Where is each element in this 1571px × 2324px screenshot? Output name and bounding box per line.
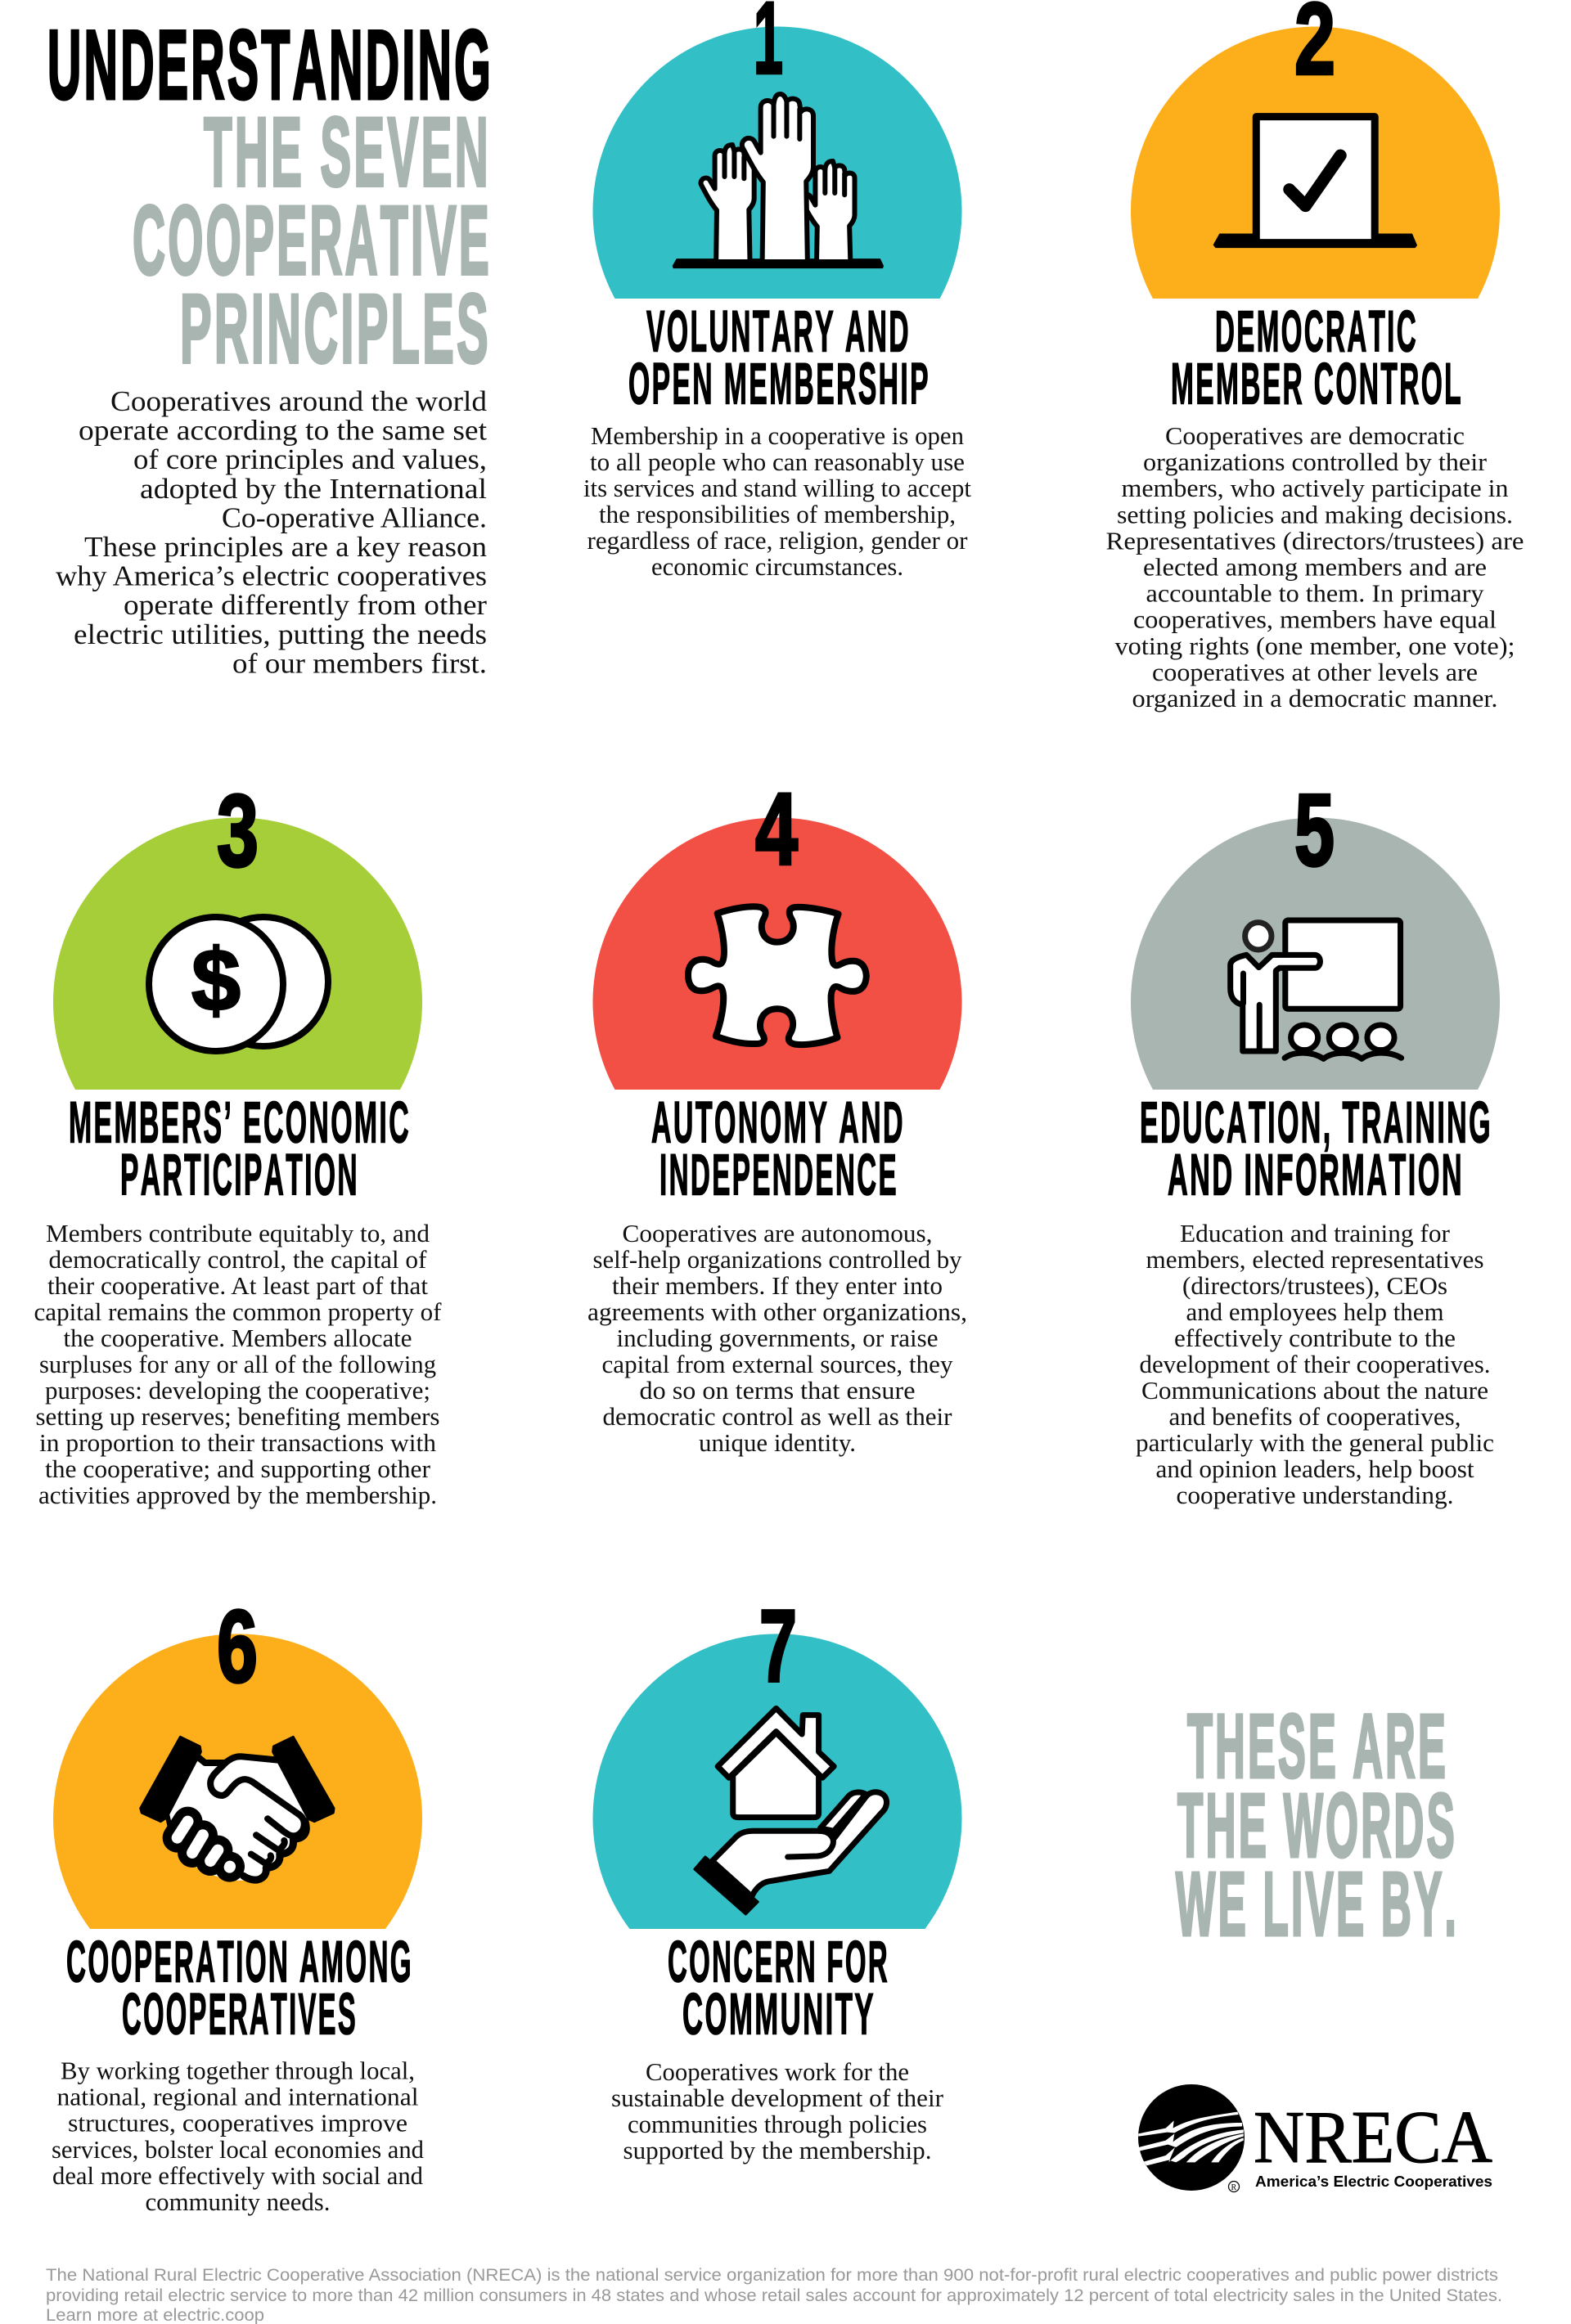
body text 3: setting up reserves; benefiting members xyxy=(36,1402,440,1431)
number 5: 5 xyxy=(1294,774,1335,888)
body text 5: and opinion leaders, help boost xyxy=(1155,1454,1474,1483)
number 6: 6 xyxy=(217,1590,258,1704)
body text 7: sustainable development of their xyxy=(611,2084,944,2112)
heading 7 xyxy=(668,1931,889,2047)
panel: principle 3: MEMBERS’ ECONOMIC xyxy=(69,1091,411,1155)
body text 3 xyxy=(34,1219,442,1509)
body text 6: community needs. xyxy=(146,2187,331,2216)
heading 1 xyxy=(628,299,930,417)
number 3: 3 xyxy=(217,774,259,888)
body text 4: democratic control as well as their xyxy=(602,1402,952,1431)
body text 3: activities approved by the membership. xyxy=(38,1481,437,1509)
body text 5: Communications about the nature xyxy=(1141,1376,1488,1405)
body text 3: the cooperative. Members allocate xyxy=(64,1324,412,1352)
footer text xyxy=(46,2266,1502,2324)
title xyxy=(47,10,493,384)
body text 5: effectively contribute to the xyxy=(1174,1324,1456,1352)
logo: NRECA xyxy=(1138,2084,1492,2192)
heading 6: COOPERATIVES xyxy=(122,1983,358,2047)
body text 2: Cooperatives are democratic xyxy=(1165,421,1465,450)
body text 3: purposes: developing the cooperative; xyxy=(45,1376,430,1405)
body text 7: supported by the membership. xyxy=(623,2136,931,2164)
panel: principle 6 xyxy=(52,1590,424,2216)
text: UNDERSTANDING xyxy=(47,10,493,119)
body text 7: Cooperatives work for the xyxy=(646,2057,909,2086)
body text 1: regardless of race, religion, gender or xyxy=(587,526,968,555)
semicircle 5 xyxy=(1131,818,1500,1090)
icon: coins: $ xyxy=(191,930,241,1029)
intro text: operate differently from other xyxy=(124,589,487,621)
footer text: providing retail electric service to more than 42 million consumers in 48 states and whose retail sales account for approximately 12 percent of total electricity sales in the United States. xyxy=(46,2286,1502,2305)
body text 7 xyxy=(611,2057,944,2164)
body text 2: accountable to them. In primary xyxy=(1146,579,1484,608)
icon: raised hands xyxy=(673,94,883,268)
text: PRINCIPLES xyxy=(180,274,491,384)
semicircle 4 xyxy=(592,818,962,1090)
panel: principle 7 xyxy=(592,1589,961,2164)
body text 5: development of their cooperatives. xyxy=(1139,1350,1491,1378)
panel: principle 5 xyxy=(1131,774,1500,1509)
text: COOPERATIVE xyxy=(133,186,492,295)
panel: principle 4: INDEPENDENCE xyxy=(659,1144,898,1207)
body text 1: the responsibilities of membership, xyxy=(599,500,956,528)
panel: principle 1: OPEN MEMBERSHIP xyxy=(628,352,930,417)
body text 4: agreements with other organizations, xyxy=(587,1297,967,1326)
intro text: of core principles and values, xyxy=(133,443,487,475)
heading 3 xyxy=(69,1091,411,1207)
logo registered mark xyxy=(1229,2181,1239,2192)
intro text: Cooperatives around the world xyxy=(110,385,488,417)
body text 6: By working together through local, xyxy=(61,2057,415,2084)
body text 6: services, bolster local economies and xyxy=(52,2135,424,2164)
semicircle 6 xyxy=(53,1634,422,1929)
intro text: operate according to the same set xyxy=(79,415,487,447)
body text 4: unique identity. xyxy=(699,1428,856,1457)
body text 4: capital from external sources, they xyxy=(602,1350,953,1378)
heading 3: PARTICIPATION xyxy=(120,1144,359,1207)
body text 2 xyxy=(1106,421,1524,712)
body text 2: cooperatives at other levels are xyxy=(1152,658,1478,686)
icon: handshake xyxy=(141,1737,334,1880)
heading 6 xyxy=(66,1931,413,2047)
body text 1: Membership in a cooperative is open xyxy=(591,421,964,450)
panel: principle 3 xyxy=(34,774,442,1509)
logo tagline: America’s Electric Cooperatives xyxy=(1255,2173,1492,2190)
footer text: The National Rural Electric Cooperative Association (NRECA) is the national service organization for more than 900 not-for-profit rural electric cooperatives and public power districts xyxy=(46,2266,1498,2285)
body text 2: elected among members and are xyxy=(1143,553,1487,581)
body text 1: to all people who can reasonably use xyxy=(590,447,965,476)
heading 2 xyxy=(1171,299,1463,417)
icon: puzzle piece xyxy=(688,906,867,1045)
heading 5 xyxy=(1140,1091,1492,1207)
body text 4: their members. If they enter into xyxy=(612,1271,943,1300)
panel: principle 2 xyxy=(1106,0,1524,712)
body text 5: and employees help them xyxy=(1186,1297,1443,1326)
body text 2: organized in a democratic manner. xyxy=(1132,684,1497,712)
panel: principle 4 xyxy=(587,772,967,1457)
body text 7: communities through policies xyxy=(628,2110,927,2138)
logo registered mark: R xyxy=(1231,2183,1237,2192)
intro text: These principles are a key reason xyxy=(84,531,487,563)
intro text: adopted by the International xyxy=(140,473,487,505)
body text 2: cooperatives, members have equal xyxy=(1133,605,1497,634)
body text 4 xyxy=(587,1219,967,1457)
intro text: why America’s electric cooperatives xyxy=(56,560,487,592)
text: THE SEVEN xyxy=(204,97,491,207)
body text 4: do so on terms that ensure xyxy=(640,1376,915,1405)
number 4: 4 xyxy=(755,772,798,887)
intro text: Co-operative Alliance. xyxy=(222,501,487,533)
body text 2: organizations controlled by their xyxy=(1143,447,1488,476)
body text 1 xyxy=(583,421,971,581)
body text 2: voting rights (one member, one vote); xyxy=(1114,632,1515,660)
intro text: electric utilities, putting the needs xyxy=(74,618,487,650)
body text 3: surpluses for any or all of the following xyxy=(39,1350,436,1378)
icon: teacher and students xyxy=(1231,920,1402,1059)
semicircle 1 xyxy=(592,27,962,299)
body text 5: members, elected representatives xyxy=(1146,1245,1484,1274)
panel: principle 7: CONCERN FOR xyxy=(668,1931,889,1994)
body text 1: its services and stand willing to accept xyxy=(583,474,971,502)
panel: principle 4: AUTONOMY AND xyxy=(651,1091,905,1155)
body text 5: (directors/trustees), CEOs xyxy=(1182,1271,1447,1300)
heading 1: VOLUNTARY AND xyxy=(646,299,911,365)
semicircle 2 xyxy=(1131,27,1500,299)
body text 6: national, regional and international xyxy=(57,2083,419,2110)
logo wordmark: NRECA xyxy=(1254,2096,1492,2178)
text: COOPERATION AMONG xyxy=(66,1931,413,1994)
icon: coins xyxy=(149,917,328,1051)
logo emblem xyxy=(1138,2084,1245,2191)
body text 3: democratically control, the capital of xyxy=(49,1245,427,1274)
closing slogan xyxy=(1176,1697,1459,1955)
body text 5: particularly with the general public xyxy=(1136,1428,1494,1457)
body text 5: cooperative understanding. xyxy=(1177,1481,1453,1509)
body text 4: Cooperatives are autonomous, xyxy=(622,1219,933,1247)
body text 2: setting policies and making decisions. xyxy=(1117,500,1513,528)
heading 7: COMMUNITY xyxy=(682,1983,876,2047)
body text 3: in proportion to their transactions with xyxy=(39,1428,436,1457)
body text 6: structures, cooperatives improve xyxy=(68,2109,407,2137)
body text 6 xyxy=(52,2057,424,2216)
intro text: of our members first. xyxy=(232,647,487,679)
intro text xyxy=(56,385,488,679)
body text 3: the cooperative; and supporting other xyxy=(45,1454,431,1483)
body text 4: including governments, or raise xyxy=(617,1324,938,1352)
body text 5 xyxy=(1136,1219,1494,1509)
body text 1: economic circumstances. xyxy=(651,552,903,581)
number 7: 7 xyxy=(759,1589,797,1703)
icon: house in hand xyxy=(695,1708,887,1914)
body text 3: Members contribute equitably to, and xyxy=(46,1219,430,1247)
body text 2: Representatives (directors/trustees) are xyxy=(1106,526,1524,555)
semicircle 7 xyxy=(592,1634,961,1929)
panel: principle 1 xyxy=(583,0,971,581)
body text 3: their cooperative. At least part of that xyxy=(47,1271,428,1300)
heading 4 xyxy=(651,1091,905,1207)
icon: ballot box xyxy=(1213,117,1417,248)
semicircle 3 xyxy=(53,818,422,1090)
body text 5: and benefits of cooperatives, xyxy=(1168,1402,1461,1431)
body text 2: members, who actively participate in xyxy=(1121,474,1509,502)
body text 6: deal more effectively with social and xyxy=(52,2161,423,2190)
body text 4: self-help organizations controlled by xyxy=(592,1245,962,1274)
body text 3: capital remains the common property of xyxy=(34,1297,442,1326)
body text 5: Education and training for xyxy=(1180,1219,1451,1247)
